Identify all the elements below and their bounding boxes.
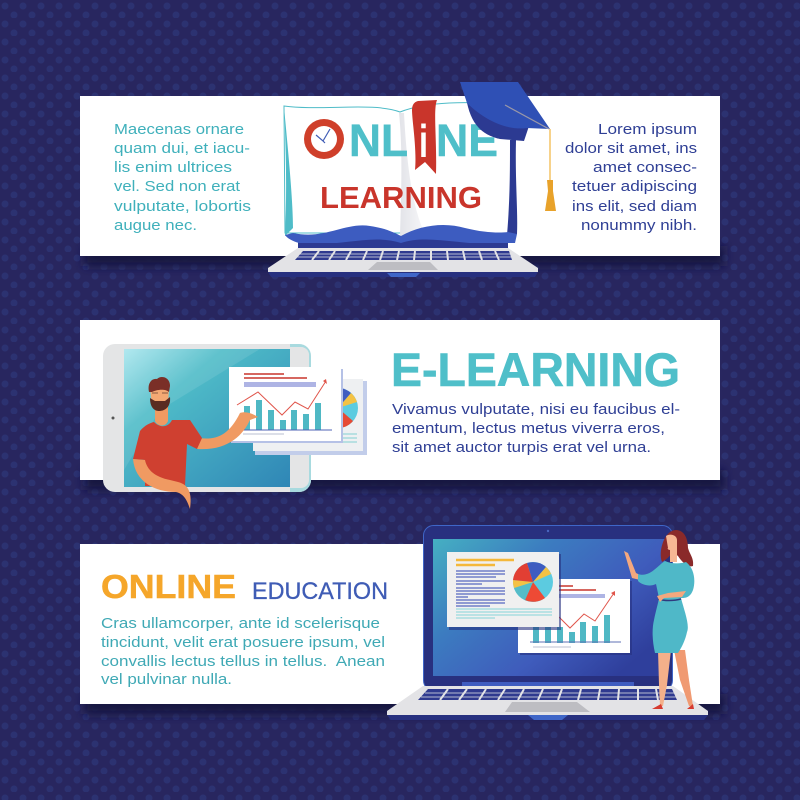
heading: ONLINE [304, 100, 498, 174]
text block: right blue paragraph: amet consec- [593, 159, 697, 176]
beard [150, 397, 170, 411]
text block: right blue paragraph [565, 121, 697, 234]
hair [149, 377, 170, 392]
right arm [197, 412, 258, 449]
illustration: presenter woman [624, 530, 694, 709]
left arm [133, 459, 191, 509]
text block: education paragraph: convallis lectus tellus in tellus. Anean [101, 653, 385, 670]
panel: e-learning banner [80, 320, 724, 490]
shirt [133, 420, 202, 486]
text block: left teal paragraph: lis enim ultrices [114, 159, 232, 176]
icon: clock as letter O [304, 119, 344, 159]
illustration: tablet [103, 344, 311, 492]
face [150, 388, 169, 410]
panel: online education banner [80, 544, 724, 714]
heading: ONLINE: NE [436, 115, 498, 166]
text block: e-learning paragraph: ementum, lectus metus viverra eros, [392, 420, 665, 437]
icon: red bookmark with letter i: i [419, 115, 428, 167]
text block: left teal paragraph: vulputate, lobortis [114, 198, 251, 215]
chart: front document with pie [447, 552, 561, 630]
text block: education paragraph: tincidunt, velit erat posuere ipsum, vel [101, 634, 385, 651]
text block: left teal paragraph: vel. Sed non erat [114, 178, 241, 195]
illustration: presenter man [133, 377, 258, 509]
orange headings [456, 560, 514, 565]
chart: rear bar and line chart [518, 579, 632, 655]
text block: e-learning paragraph: sit amet auctor turpis erat vel urna. [392, 439, 651, 456]
text block: education paragraph: vel pulvinar nulla. [101, 671, 232, 688]
text block: left teal paragraph: quam dui, et iacu- [114, 140, 250, 157]
text block: right blue paragraph: ins elit, sed diam [572, 198, 697, 215]
neck and face [666, 535, 677, 562]
shoes [652, 704, 663, 709]
glasses [152, 392, 168, 394]
text block: right blue paragraph: tetuer adipiscing [572, 178, 697, 195]
text block: right blue paragraph: nonummy nibh. [581, 217, 697, 234]
legs [658, 650, 671, 706]
text block: left teal paragraph: augue nec. [114, 217, 197, 234]
neck [155, 405, 168, 426]
panel: online learning banner [80, 96, 724, 266]
icon: red bookmark with letter i [412, 100, 437, 174]
chart: front bar and line chart [229, 367, 343, 443]
text block: e-learning paragraph: Vivamus vulputate, nisi eu faucibus el- [392, 401, 680, 418]
illustration: large laptop [387, 526, 708, 720]
dress [638, 561, 694, 653]
text block: right blue paragraph: Lorem ipsum [598, 121, 697, 138]
heading: ONLINE: NL [349, 115, 408, 166]
belt [658, 599, 681, 600]
pie chart [513, 562, 553, 602]
hair [661, 530, 693, 566]
heading: ONLINE: ONLINE [101, 568, 236, 605]
text block: left teal paragraph: Maecenas ornare [114, 121, 244, 138]
illustration: open book [284, 100, 517, 248]
text block: right blue paragraph: dolor sit amet, ins [565, 140, 697, 157]
text block: e-learning paragraph [392, 401, 680, 456]
chart: rear document with pie [253, 379, 367, 455]
illustration: laptop under book [268, 238, 538, 277]
teal text lines [456, 609, 552, 618]
heading: LEARNING: LEARNING [320, 180, 482, 215]
text block: left teal paragraph [114, 121, 251, 234]
text block: education paragraph: Cras ullamcorper, ante id scelerisque [101, 615, 380, 632]
raised arm [624, 551, 642, 580]
heading: E-LEARNING: E-LEARNING [391, 343, 680, 396]
blue text lines [456, 571, 505, 606]
icon: graduation cap [460, 82, 556, 211]
hip arm [657, 591, 686, 602]
heading: EDUCATION: EDUCATION [252, 578, 388, 605]
text block: education paragraph [101, 615, 385, 688]
